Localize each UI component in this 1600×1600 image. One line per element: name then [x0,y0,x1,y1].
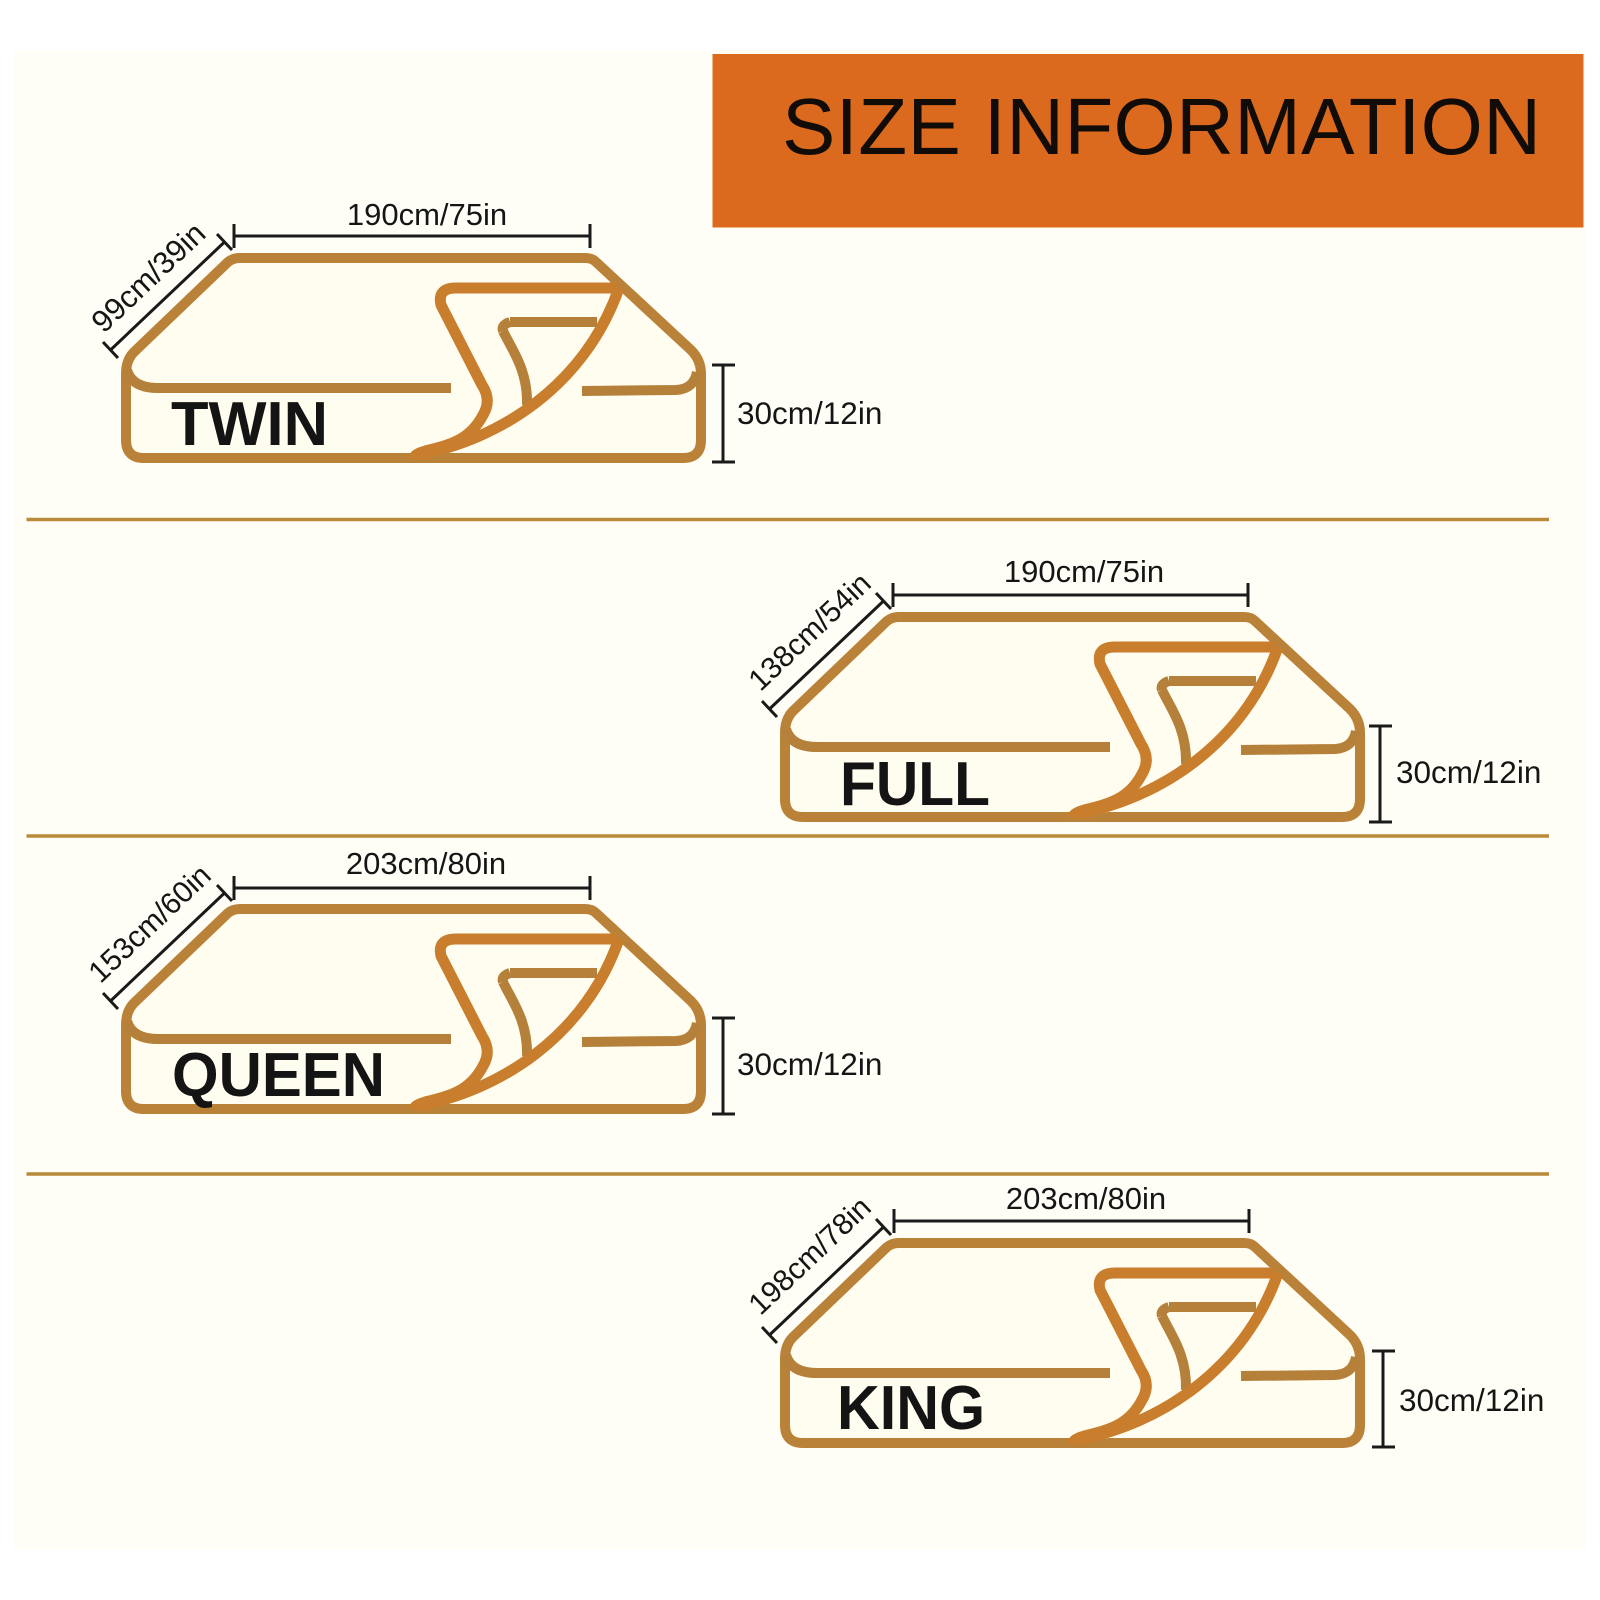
length dimension: 203cm/80in [1006,1181,1166,1216]
panel: king [742,1181,1544,1447]
divider [26,1172,1549,1176]
length dimension [894,1181,1249,1233]
width dimension: 138cm/54in [742,567,878,697]
mattress illustration [785,1243,1360,1445]
panel: queen [82,846,882,1114]
length dimension [234,197,590,248]
height dimension: 30cm/12in [737,1046,882,1082]
mattress illustration [126,909,701,1111]
divider [26,518,1549,521]
height dimension [712,365,882,462]
size name: TWIN [171,390,328,459]
size name: QUEEN [172,1041,385,1110]
height dimension [1372,1351,1544,1447]
mattress illustration [785,617,1360,819]
height dimension: 30cm/12in [1396,754,1541,790]
length dimension [893,554,1248,607]
height dimension [1369,726,1541,822]
length dimension: 203cm/80in [346,846,506,881]
divider [26,834,1549,838]
width dimension: 99cm/39in [84,215,212,339]
size name: FULL [840,750,990,819]
height dimension: 30cm/12in [1399,1382,1544,1418]
title banner: SIZE INFORMATION [782,82,1541,171]
length dimension [234,846,590,900]
length dimension: 190cm/75in [1004,554,1164,589]
width dimension: 153cm/60in [82,859,218,989]
size name: KING [837,1374,985,1443]
width dimension: 198cm/78in [742,1191,878,1321]
length dimension: 190cm/75in [347,197,507,232]
mattress illustration [126,258,701,460]
height dimension [712,1018,882,1114]
height dimension: 30cm/12in [737,395,882,431]
title banner [712,54,1584,228]
panel: twin [84,197,882,462]
panel: full [742,554,1541,822]
